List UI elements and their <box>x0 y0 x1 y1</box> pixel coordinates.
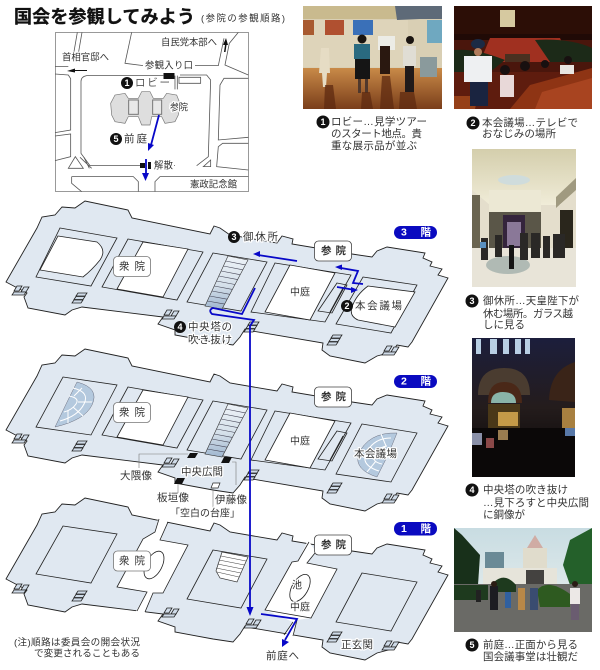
label: statues <box>120 465 248 520</box>
photo 2: plenary chamber <box>454 6 592 109</box>
label: statues: 板垣像 <box>157 491 190 504</box>
badge: 1階 <box>394 522 437 536</box>
caption 2: おなじみの場所 <box>482 127 556 140</box>
caption 2: 本会議場…テレビで <box>482 116 578 129</box>
note: (注)順路は委員会の開会状況 <box>14 636 140 648</box>
map labels: ロビー <box>135 77 170 89</box>
labels: 1st floor: 池 <box>292 578 302 592</box>
label: 衆院 <box>114 256 150 276</box>
map labels: 1 <box>124 78 130 88</box>
badge: 3階: 3 階 <box>401 226 432 238</box>
panel: 2nd floor plan <box>6 349 448 520</box>
label: 参院 <box>314 535 352 555</box>
badge: 3階 <box>394 226 437 239</box>
label: 中央塔の吹き抜け: 吹き抜け <box>188 333 232 346</box>
caption 1: 1 <box>320 117 326 127</box>
map labels: 5 <box>113 134 119 144</box>
hall: house of councillors chamber void <box>336 277 417 333</box>
map labels: 首相官邸へ <box>62 52 109 62</box>
caption 1 <box>316 115 427 152</box>
caption 2 <box>466 116 578 140</box>
label: 中央塔の吹き抜け: 中央塔の <box>188 320 232 333</box>
icon: statue pedestals <box>174 453 232 488</box>
caption 3 <box>466 294 580 331</box>
map labels <box>62 36 237 190</box>
hall: house of representatives chamber void <box>36 228 117 286</box>
caption 3: しに見る <box>483 319 525 331</box>
label: statues: 「空白の台座」 <box>170 506 240 520</box>
icon: exit marker <box>140 162 151 169</box>
map labels: 参観入り口 <box>145 60 193 70</box>
photo 3: imperial rest room <box>472 149 576 287</box>
label: 参院: 参 院 <box>321 390 346 403</box>
map roads <box>55 32 248 192</box>
label: 衆院: 衆 院 <box>119 554 146 567</box>
arrow: route to front garden <box>148 115 159 151</box>
panel: 3rd floor plan <box>6 201 448 363</box>
map labels: 前庭 <box>124 132 148 145</box>
caption 2: 2 <box>470 118 476 128</box>
labels: 1st floor: 中庭 <box>290 600 310 614</box>
label: statues: 伊藤像 <box>215 493 248 506</box>
label: 衆院 <box>114 551 150 571</box>
panel: location map <box>55 32 248 192</box>
caption 4: 中央塔の吹き抜け <box>483 483 568 496</box>
label: 本会議場: 2 <box>344 301 350 311</box>
photo 4: central tower atrium <box>472 338 575 477</box>
caption 5 <box>466 638 578 663</box>
icon: stairs <box>205 404 248 457</box>
note <box>14 636 140 660</box>
label: statues: 中央広間 <box>181 465 223 478</box>
caption 3: 3 <box>469 296 475 306</box>
label: 参院: 参 院 <box>321 538 346 551</box>
icon: stairs <box>205 256 248 309</box>
courtyard: center open space <box>265 540 337 640</box>
caption 3: 休む場所。ガラス越 <box>483 307 574 320</box>
caption 4: …見下ろすと中央広間 <box>483 496 589 509</box>
caption 5: 国会議事堂は壮観だ <box>483 650 578 663</box>
map labels: 解散 <box>154 160 174 170</box>
caption 1: のスタート地点。貴 <box>331 127 422 140</box>
caption 5: 5 <box>469 640 475 650</box>
title: 国会を参観してみよう <box>14 7 195 27</box>
label: 参院: 参 院 <box>321 244 346 257</box>
hall: house of councillors chamber <box>336 424 417 482</box>
leader lines <box>139 454 236 508</box>
icon: stairs <box>216 552 248 582</box>
hall: stairs court <box>187 550 267 608</box>
label: 御休所: 3 <box>231 232 237 242</box>
arrow: route through central tower <box>210 288 255 616</box>
hall: left wing outline <box>36 526 117 583</box>
icons: restrooms <box>12 584 399 650</box>
label: 衆院: 衆 院 <box>119 260 146 272</box>
label: 参院 <box>314 387 352 407</box>
label: 中央塔の吹き抜け: 4 <box>177 322 183 332</box>
arrow: road direction up <box>223 38 228 52</box>
route: blue path on 1st floor <box>261 614 297 647</box>
photo 5: front garden and National Diet Building <box>454 528 592 632</box>
label: statues: 大隈像 <box>120 469 152 482</box>
caption 3: 御休所…天皇陛下が <box>483 294 580 307</box>
map labels: 憲政記念館 <box>190 178 237 190</box>
label: 中庭: 中庭 <box>290 286 310 298</box>
caption 4: 4 <box>469 485 475 495</box>
icon: house of councillors building <box>111 92 180 125</box>
labels: 1st floor: 正玄関 <box>341 638 373 651</box>
arrow: route out <box>142 159 149 181</box>
icon: entrance marker <box>164 73 174 79</box>
hall: house of representatives chamber <box>36 377 117 435</box>
caption 1: 重な展示品が並ぶ <box>331 139 418 152</box>
label: 御休所: 御休所 <box>243 230 278 243</box>
label: 衆院: 衆 院 <box>119 406 146 418</box>
hall: right wing outline <box>336 573 417 631</box>
caption 4 <box>466 483 589 521</box>
badge: 1階: 1 階 <box>401 522 432 535</box>
subtitle: (参院の参観順路) <box>201 12 285 24</box>
courtyard: left open space <box>117 515 188 615</box>
panel: 1st floor plan <box>6 498 448 662</box>
caption 5: 前庭…正面から見る <box>483 638 578 651</box>
arrow: road direction left <box>67 68 87 72</box>
photo 1: lobby <box>303 6 442 109</box>
badge: 2階 <box>394 374 437 388</box>
label: 本会議場: 本会議場 <box>354 447 398 460</box>
label: 衆院 <box>114 402 150 422</box>
label: 中央塔の吹き抜け <box>174 320 232 346</box>
labels: 1st floor <box>266 578 373 662</box>
map labels: 自民党本部へ <box>161 36 217 48</box>
badge: 2階: 2 階 <box>401 374 432 388</box>
route: blue path on 3rd floor <box>253 251 363 293</box>
label: 御休所 <box>228 230 278 243</box>
label: 参院 <box>314 241 352 261</box>
labels: 1st floor: 前庭へ <box>266 649 299 662</box>
map labels: 参院 <box>170 102 188 112</box>
caption 1: ロビー…見学ツアー <box>331 115 427 128</box>
label: 本会議場: 本会議場 <box>355 299 402 312</box>
label: 中庭: 中庭 <box>290 434 310 448</box>
note: で変更されることもある <box>34 648 140 660</box>
caption 4: に銅像が <box>483 508 526 521</box>
